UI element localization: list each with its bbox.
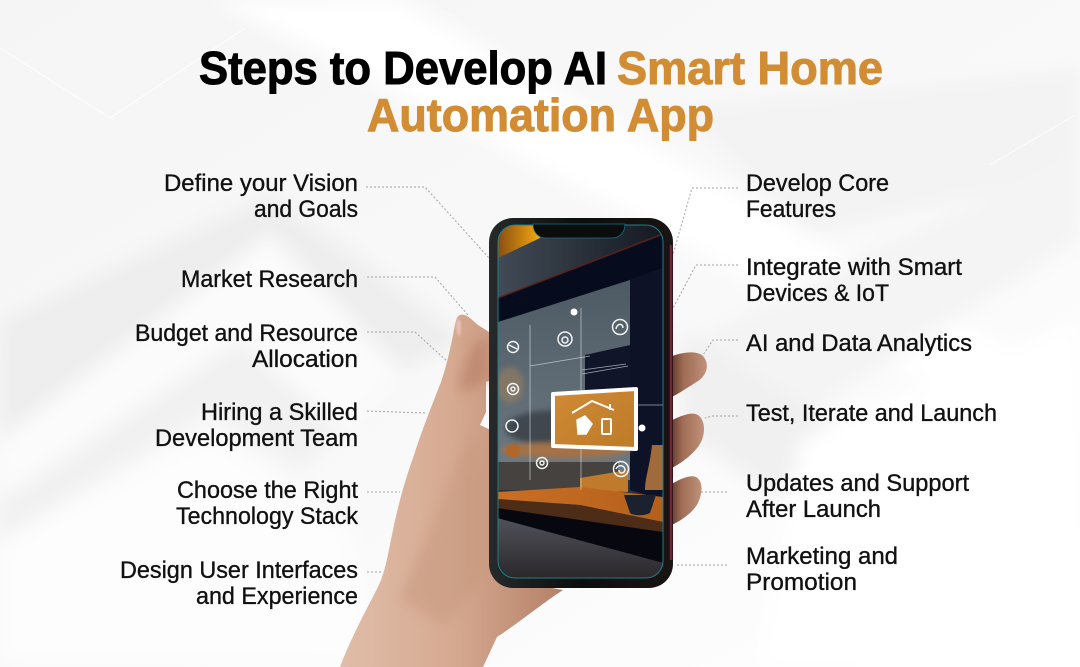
step: Test, Iterate and Launch: Test, Iterate and Launch bbox=[746, 400, 997, 427]
step: Budget and Resource Allocation: Budget and Resource bbox=[135, 320, 358, 347]
title: Steps to Develop AI bbox=[199, 42, 607, 94]
step: Develop Core Features: Features bbox=[746, 196, 836, 223]
icon: lower right spiral bbox=[614, 462, 628, 476]
left step labels bbox=[120, 170, 359, 610]
icon: orange badge bbox=[506, 444, 520, 458]
step: Integrate with Smart Devices and IoT: Devices & IoT bbox=[746, 280, 889, 307]
title: Smart Home bbox=[617, 42, 883, 94]
step: Choose the Right Technology Stack bbox=[176, 477, 359, 530]
hand: fingers bbox=[668, 352, 707, 527]
screen protector outline bbox=[498, 225, 663, 578]
icon: wall switch bbox=[602, 419, 611, 434]
title bbox=[199, 42, 883, 141]
step: Market Research: Market Research bbox=[181, 266, 358, 293]
hand holding the phone bbox=[340, 315, 707, 667]
step: Define your Vision and Goals bbox=[164, 170, 358, 223]
smartphone bbox=[489, 218, 673, 588]
dotted leader lines bbox=[366, 187, 738, 572]
screen: dark ceiling beam bbox=[498, 234, 663, 322]
icon: hand on device bbox=[577, 416, 592, 434]
icon: lower mid dial bbox=[536, 458, 548, 468]
step: Choose the Right Technology Stack: Choose the Right bbox=[177, 477, 358, 504]
step: Budget and Resource Allocation bbox=[135, 320, 358, 373]
screen: interface grid lines bbox=[530, 308, 663, 490]
step: Marketing and Promotion bbox=[746, 543, 898, 596]
screen: orange corner bbox=[498, 225, 540, 258]
phone body bbox=[489, 218, 673, 588]
screen: upper wall bbox=[498, 225, 663, 298]
icon: left top dial bbox=[508, 342, 518, 352]
icon: top dial bbox=[558, 332, 572, 346]
icon: left low dial bbox=[506, 420, 518, 432]
step: Develop Core Features: Develop Core bbox=[746, 170, 889, 197]
step: Marketing and Promotion: Marketing and bbox=[746, 543, 898, 570]
step: Design User Interfaces and Experience: Design User Interfaces bbox=[120, 557, 358, 584]
title: Automation App bbox=[367, 89, 714, 141]
hand: palm and thumb bbox=[340, 315, 563, 667]
step: Integrate with Smart Devices and IoT: Integrate with Smart bbox=[746, 254, 962, 281]
right step labels bbox=[746, 170, 997, 596]
step: Design User Interfaces and Experience bbox=[120, 557, 358, 610]
screen: dark right panel bbox=[630, 268, 663, 500]
screen: desk bbox=[498, 487, 663, 522]
phone screen bbox=[496, 225, 663, 578]
icon: house roof bbox=[572, 401, 614, 413]
step: Develop Core Features bbox=[746, 170, 889, 223]
step: Hiring a Skilled Development Team: Development Team bbox=[155, 425, 358, 452]
step: Design User Interfaces and Experience: and Experience bbox=[196, 583, 358, 610]
step: Updates and Support After Launch: Updates and Support bbox=[746, 470, 969, 497]
step: AI and Data Analytics: AI and Data Analytics bbox=[746, 330, 972, 357]
white dot: upper bbox=[570, 308, 578, 316]
step: Updates and Support After Launch: After Launch bbox=[746, 496, 881, 523]
step: Marketing and Promotion: Promotion bbox=[746, 569, 857, 596]
step: Choose the Right Technology Stack: Technology Stack bbox=[176, 503, 359, 530]
smart home card bbox=[553, 389, 636, 449]
icon: left mid dial bbox=[508, 384, 518, 394]
step: Updates and Support After Launch bbox=[746, 470, 969, 523]
step: Define your Vision and Goals: Define your Vision bbox=[164, 170, 358, 197]
step: Define your Vision and Goals: and Goals bbox=[254, 196, 358, 223]
screen: floor bbox=[497, 518, 663, 578]
phone notch bbox=[533, 224, 625, 238]
screen: blurred interior bbox=[502, 408, 551, 444]
step: Budget and Resource Allocation: Allocation bbox=[252, 346, 358, 373]
step: Integrate with Smart Devices and IoT bbox=[746, 254, 962, 307]
white dot: right bbox=[638, 424, 646, 432]
step: Hiring a Skilled Development Team: Hiring a Skilled bbox=[201, 399, 358, 426]
step: Hiring a Skilled Development Team bbox=[155, 399, 358, 452]
screen: floating icons bbox=[506, 320, 628, 476]
icon: right top dial bbox=[612, 320, 628, 334]
screen: glass wall bbox=[498, 280, 630, 480]
screen: dark lower beam bbox=[497, 508, 663, 563]
screen: bowl bbox=[624, 495, 656, 515]
